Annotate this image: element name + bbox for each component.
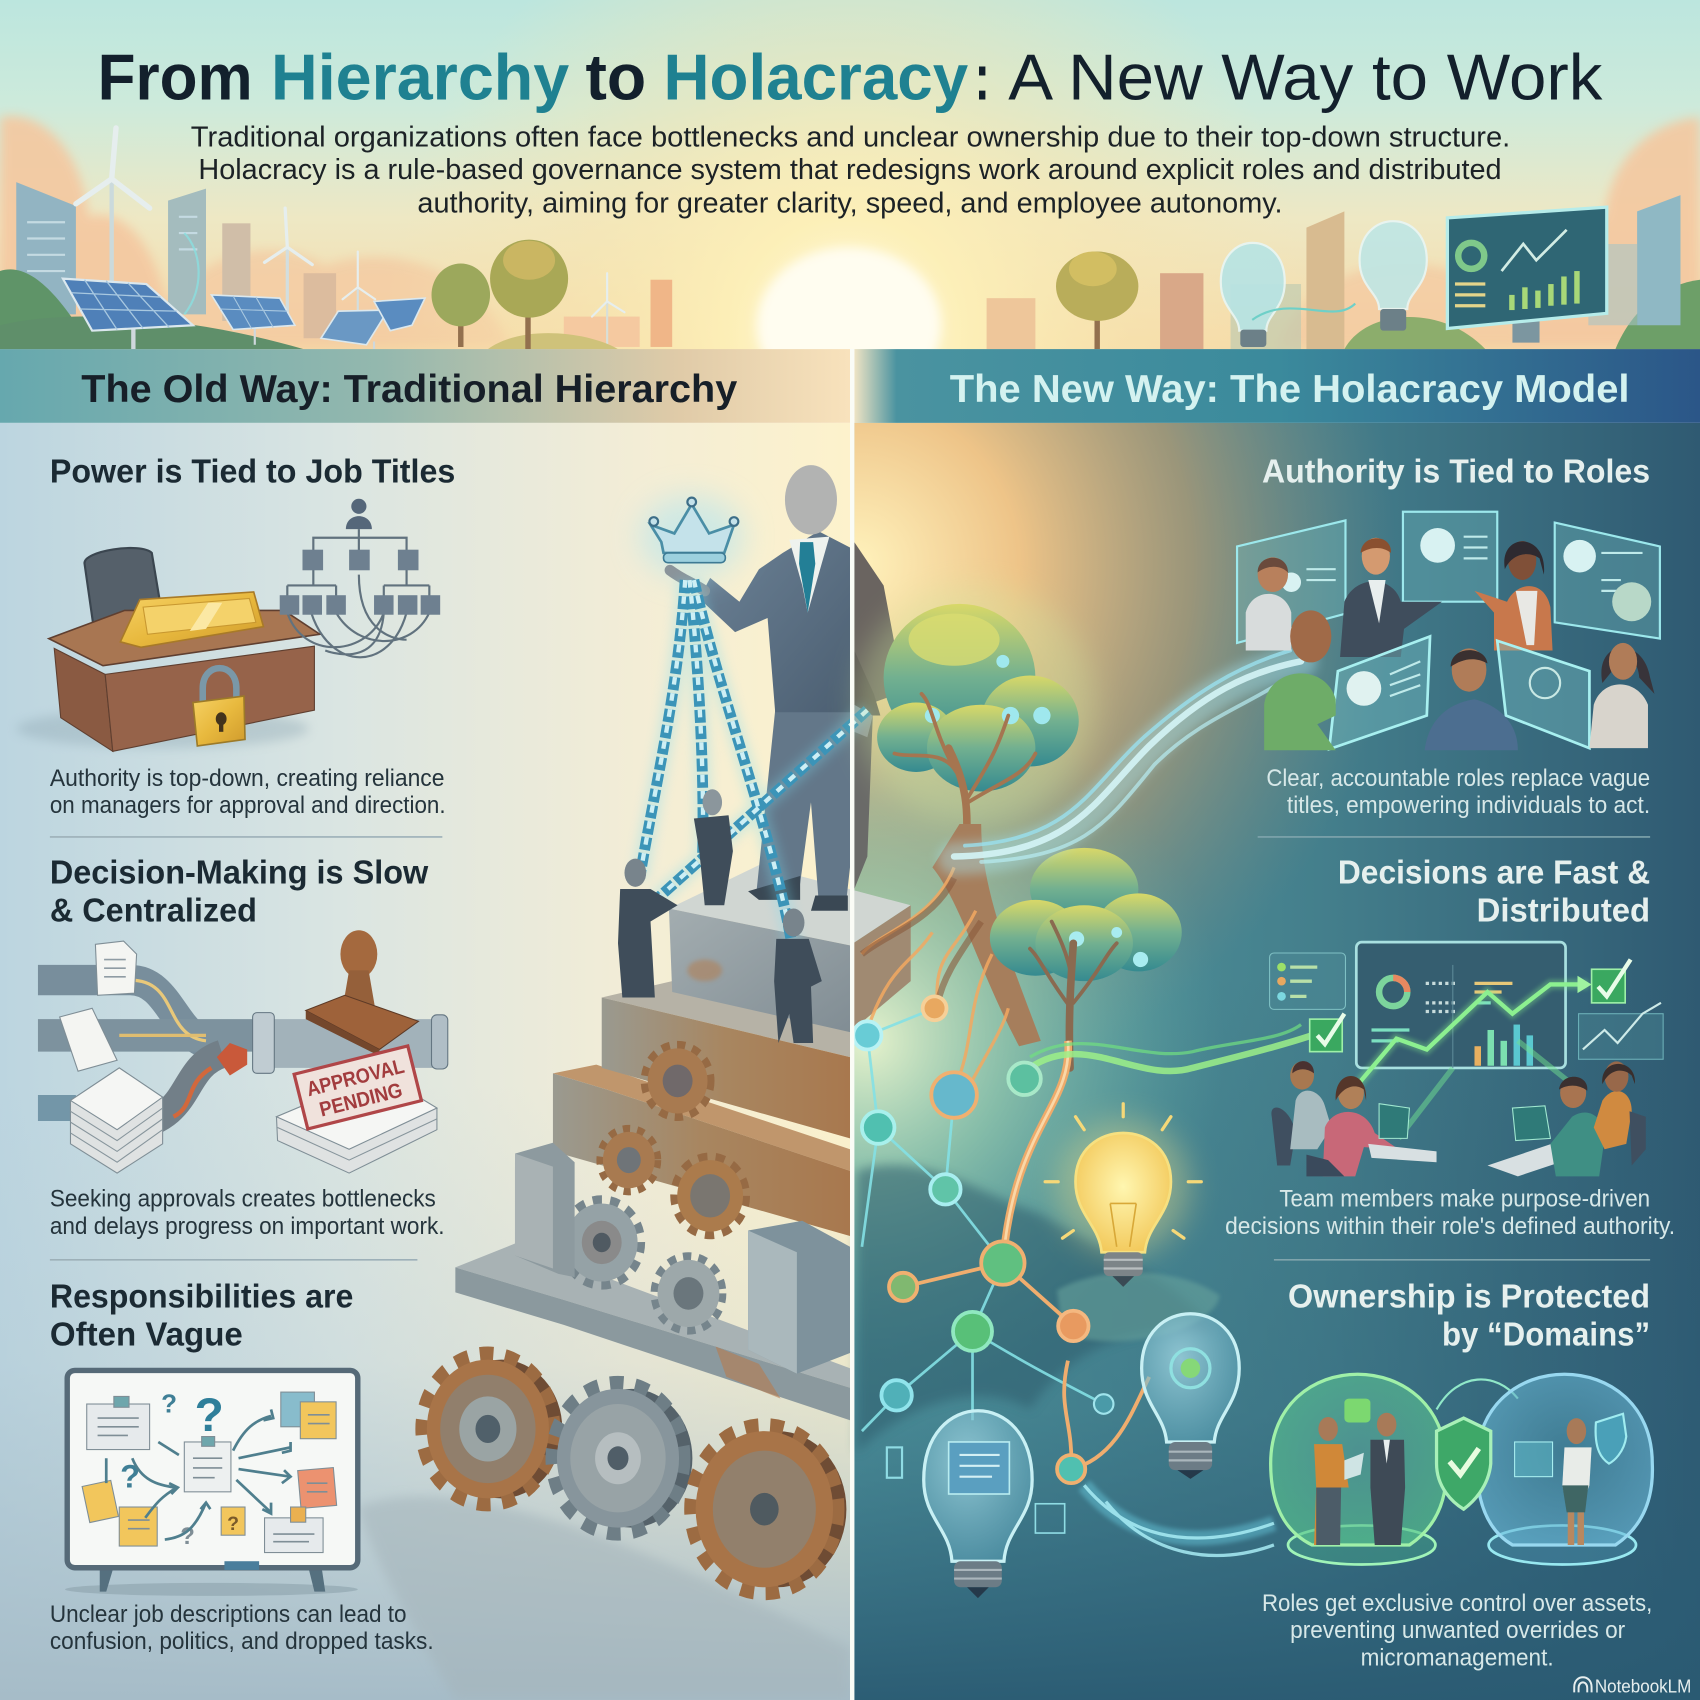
illustration: big gears under the platform (423, 1355, 846, 1592)
second tier (602, 981, 850, 1138)
canopy (877, 604, 1079, 791)
trunk and branches (894, 694, 1035, 857)
dark rock behind roots (857, 1165, 1214, 1453)
title: Hierarchy (271, 41, 569, 114)
icon: glass lightbulb with gear (1142, 1314, 1239, 1479)
title: to (585, 41, 646, 114)
intro paragraph: Traditional organizations often face bottlenecks and unclear ownership due to their top-down structure. (191, 121, 1510, 153)
platform (455, 1244, 850, 1420)
person dark suit (1340, 538, 1442, 657)
green shield (1437, 1418, 1491, 1509)
question marks: ? (227, 1513, 239, 1535)
question marks: ? (180, 1523, 195, 1550)
right side jacket in warm tone (854, 542, 900, 705)
new way: decisions description: Team members make purpose-driven (1279, 1186, 1650, 1213)
left list panel (1270, 953, 1345, 1009)
second tree (990, 848, 1182, 981)
new way: decisions heading (1338, 855, 1650, 930)
corner blocks (515, 1143, 850, 1374)
front role panels (1329, 636, 1589, 749)
old way: power heading: Power is Tied to Job Titles (50, 453, 455, 490)
shirt and tie (789, 537, 829, 613)
title: : (975, 41, 990, 114)
illustration: glowing chains (640, 580, 867, 981)
roots (862, 867, 1008, 1090)
right tree (1056, 252, 1138, 349)
paper stacks (70, 1068, 437, 1173)
gold nameplate (120, 592, 263, 647)
right city skyline (987, 195, 1680, 349)
illustration: small chained figures (618, 789, 822, 1043)
right mini chart (1579, 1014, 1663, 1059)
new way: decisions description (1225, 1186, 1675, 1240)
green bubble (1271, 1374, 1446, 1564)
approval pending stamp label (294, 1046, 421, 1129)
rubber stamp (340, 930, 377, 978)
lines on notes (98, 1415, 330, 1542)
desk body (54, 648, 113, 751)
illustration: confusing whiteboard (65, 1370, 358, 1596)
lightbulbs in header (1221, 221, 1427, 347)
first tree glow (857, 585, 1095, 824)
new way: authority heading: Authority is Tied to Roles (1262, 453, 1650, 490)
new way: decisions heading: Distributed (1477, 893, 1650, 930)
left desk team (1271, 1061, 1437, 1176)
pipes (38, 980, 271, 1128)
hand (854, 705, 873, 737)
blue ribbon to bubbles (1084, 1485, 1274, 1538)
left city skyline (16, 182, 672, 347)
solar panels (63, 279, 425, 349)
monitor with dashboard (1447, 207, 1607, 343)
icon: glowing crown (640, 495, 744, 591)
back role panels (1237, 512, 1660, 643)
nodes (853, 996, 1113, 1483)
old way: power description (50, 765, 446, 819)
board (67, 1370, 358, 1568)
teal links (862, 1008, 1104, 1431)
new way: ownership description: preventing unwanted overrides or (1290, 1617, 1625, 1644)
old way: decision description: Seeking approvals creates bottlenecks (50, 1186, 436, 1213)
old way: responsibilities heading: Responsibilities are (50, 1279, 353, 1316)
icon: glass lightbulb with document (887, 1411, 1065, 1598)
question marks (120, 1389, 239, 1550)
desk top (49, 610, 320, 666)
old way: decision heading (50, 855, 429, 930)
person blue jacket (1425, 648, 1518, 750)
old way: responsibilities description (50, 1601, 434, 1655)
old way: decision description: and delays progress on important work. (50, 1213, 445, 1240)
illustration: people with role cards (1237, 512, 1660, 750)
new way: ownership description: Roles get exclusive control over assets, (1262, 1590, 1652, 1617)
approval pending stamp label: APPROVAL (304, 1055, 407, 1101)
question marks: ? (120, 1458, 140, 1494)
section heading: old way: The Old Way: Traditional Hierarchy (81, 368, 738, 411)
person green sweater (1264, 610, 1336, 750)
title (98, 41, 1603, 114)
question marks: ? (161, 1389, 177, 1419)
sun disc (757, 247, 941, 403)
old way: responsibilities heading: Often Vague (50, 1316, 243, 1353)
new way: decisions description: decisions within their role's defined authority. (1225, 1213, 1675, 1240)
rising green arrow (1344, 984, 1588, 1100)
central divider (850, 349, 854, 1700)
head (785, 465, 837, 535)
NotebookLM watermark: NotebookLM (1595, 1675, 1691, 1696)
new way: ownership description (1262, 1590, 1652, 1671)
old way: decision heading: & Centralized (50, 893, 257, 930)
main screen (1356, 942, 1566, 1068)
floor shadow (16, 709, 309, 748)
flowing orange root to bulb (1003, 1041, 1068, 1263)
new way: authority description: Clear, accountable roles replace vague (1266, 765, 1650, 792)
right desk team (1488, 1061, 1646, 1176)
left trees (432, 240, 568, 349)
approval pending stamp label: PENDING (317, 1079, 405, 1121)
old way: responsibilities description: Unclear job descriptions can lead to (50, 1601, 407, 1628)
header bar: new way (854, 349, 1700, 423)
title: A New Way to Work (1008, 41, 1603, 114)
header bar: old way (0, 349, 850, 423)
ground shadow (358, 1496, 850, 1700)
green check left (1310, 1019, 1342, 1052)
illustration: light stream flowing to roles (954, 651, 1301, 862)
orange links (903, 1263, 1149, 1469)
illustration: man in suit (699, 465, 900, 911)
blue bubble (1477, 1374, 1652, 1564)
left panel background (0, 423, 850, 1700)
third tier (553, 1065, 850, 1236)
section heading: new way: The New Way: The Holacracy Model (950, 368, 1630, 411)
linking arc (1437, 1379, 1518, 1409)
illustration: network nodes (853, 996, 1312, 1555)
icon: tangled org chart (280, 499, 440, 657)
person orange jacket (1474, 541, 1553, 651)
old way: responsibilities heading (50, 1279, 353, 1353)
person white blouse (1246, 557, 1291, 651)
person off-white sweater (1589, 643, 1654, 748)
illustration: trees with flowing roots (857, 585, 1182, 1263)
intro paragraph: Holacracy is a rule-based governance system that redesigns work around explicit roles and distributed (198, 154, 1502, 186)
right panel background (854, 423, 1700, 1700)
green bushes (0, 269, 1700, 349)
paper sheets (95, 941, 137, 995)
old way: decision description (50, 1186, 445, 1240)
new way: authority description: titles, empowering individuals to act. (1287, 792, 1650, 819)
orange clouds (0, 116, 1700, 347)
old way: power description: on managers for approval and direction. (50, 792, 446, 819)
arrows (106, 1409, 291, 1540)
top block (669, 865, 911, 1032)
title: Holacracy (664, 41, 968, 114)
new way: ownership heading: by “Domains” (1442, 1316, 1650, 1353)
jacket (699, 531, 850, 712)
green wave (1030, 1035, 1312, 1071)
new way: authority description (1266, 765, 1650, 819)
red blockage (217, 1043, 247, 1076)
green check right (1592, 969, 1625, 1003)
old way: responsibilities description: confusion, politics, and dropped tasks. (50, 1628, 434, 1655)
title: From (98, 41, 253, 114)
new way: decisions heading: Decisions are Fast & (1338, 855, 1650, 892)
question marks: ? (195, 1389, 224, 1442)
header background scene (0, 0, 1700, 403)
icon: glowing yellow lightbulb (1045, 1104, 1201, 1287)
padlock (203, 668, 236, 703)
legs and shadow (65, 1583, 358, 1596)
notes (82, 1392, 337, 1553)
wind turbines (76, 128, 624, 347)
illustration: clogged pipes and stamp (38, 930, 448, 1173)
legs (757, 710, 850, 906)
intro paragraph (191, 121, 1510, 220)
new way: ownership heading: Ownership is Protected (1288, 1279, 1650, 1316)
new way: ownership heading (1288, 1279, 1650, 1353)
illustration: stepped stone pyramid (455, 865, 911, 1420)
intro paragraph: authority, aiming for greater clarity, speed, and employee autonomy. (417, 188, 1283, 219)
illustration: desk, nameplate and lock (16, 548, 320, 751)
small gears (564, 1046, 745, 1329)
illustration: decision dashboard (1270, 942, 1663, 1176)
illustration: protected domain bubbles (1271, 1374, 1652, 1564)
old way: decision heading: Decision-Making is Slow (50, 855, 429, 892)
new way: ownership description: micromanagement. (1361, 1644, 1554, 1671)
old way: power description: Authority is top-down, creating reliance (50, 765, 445, 792)
chair (85, 548, 163, 640)
